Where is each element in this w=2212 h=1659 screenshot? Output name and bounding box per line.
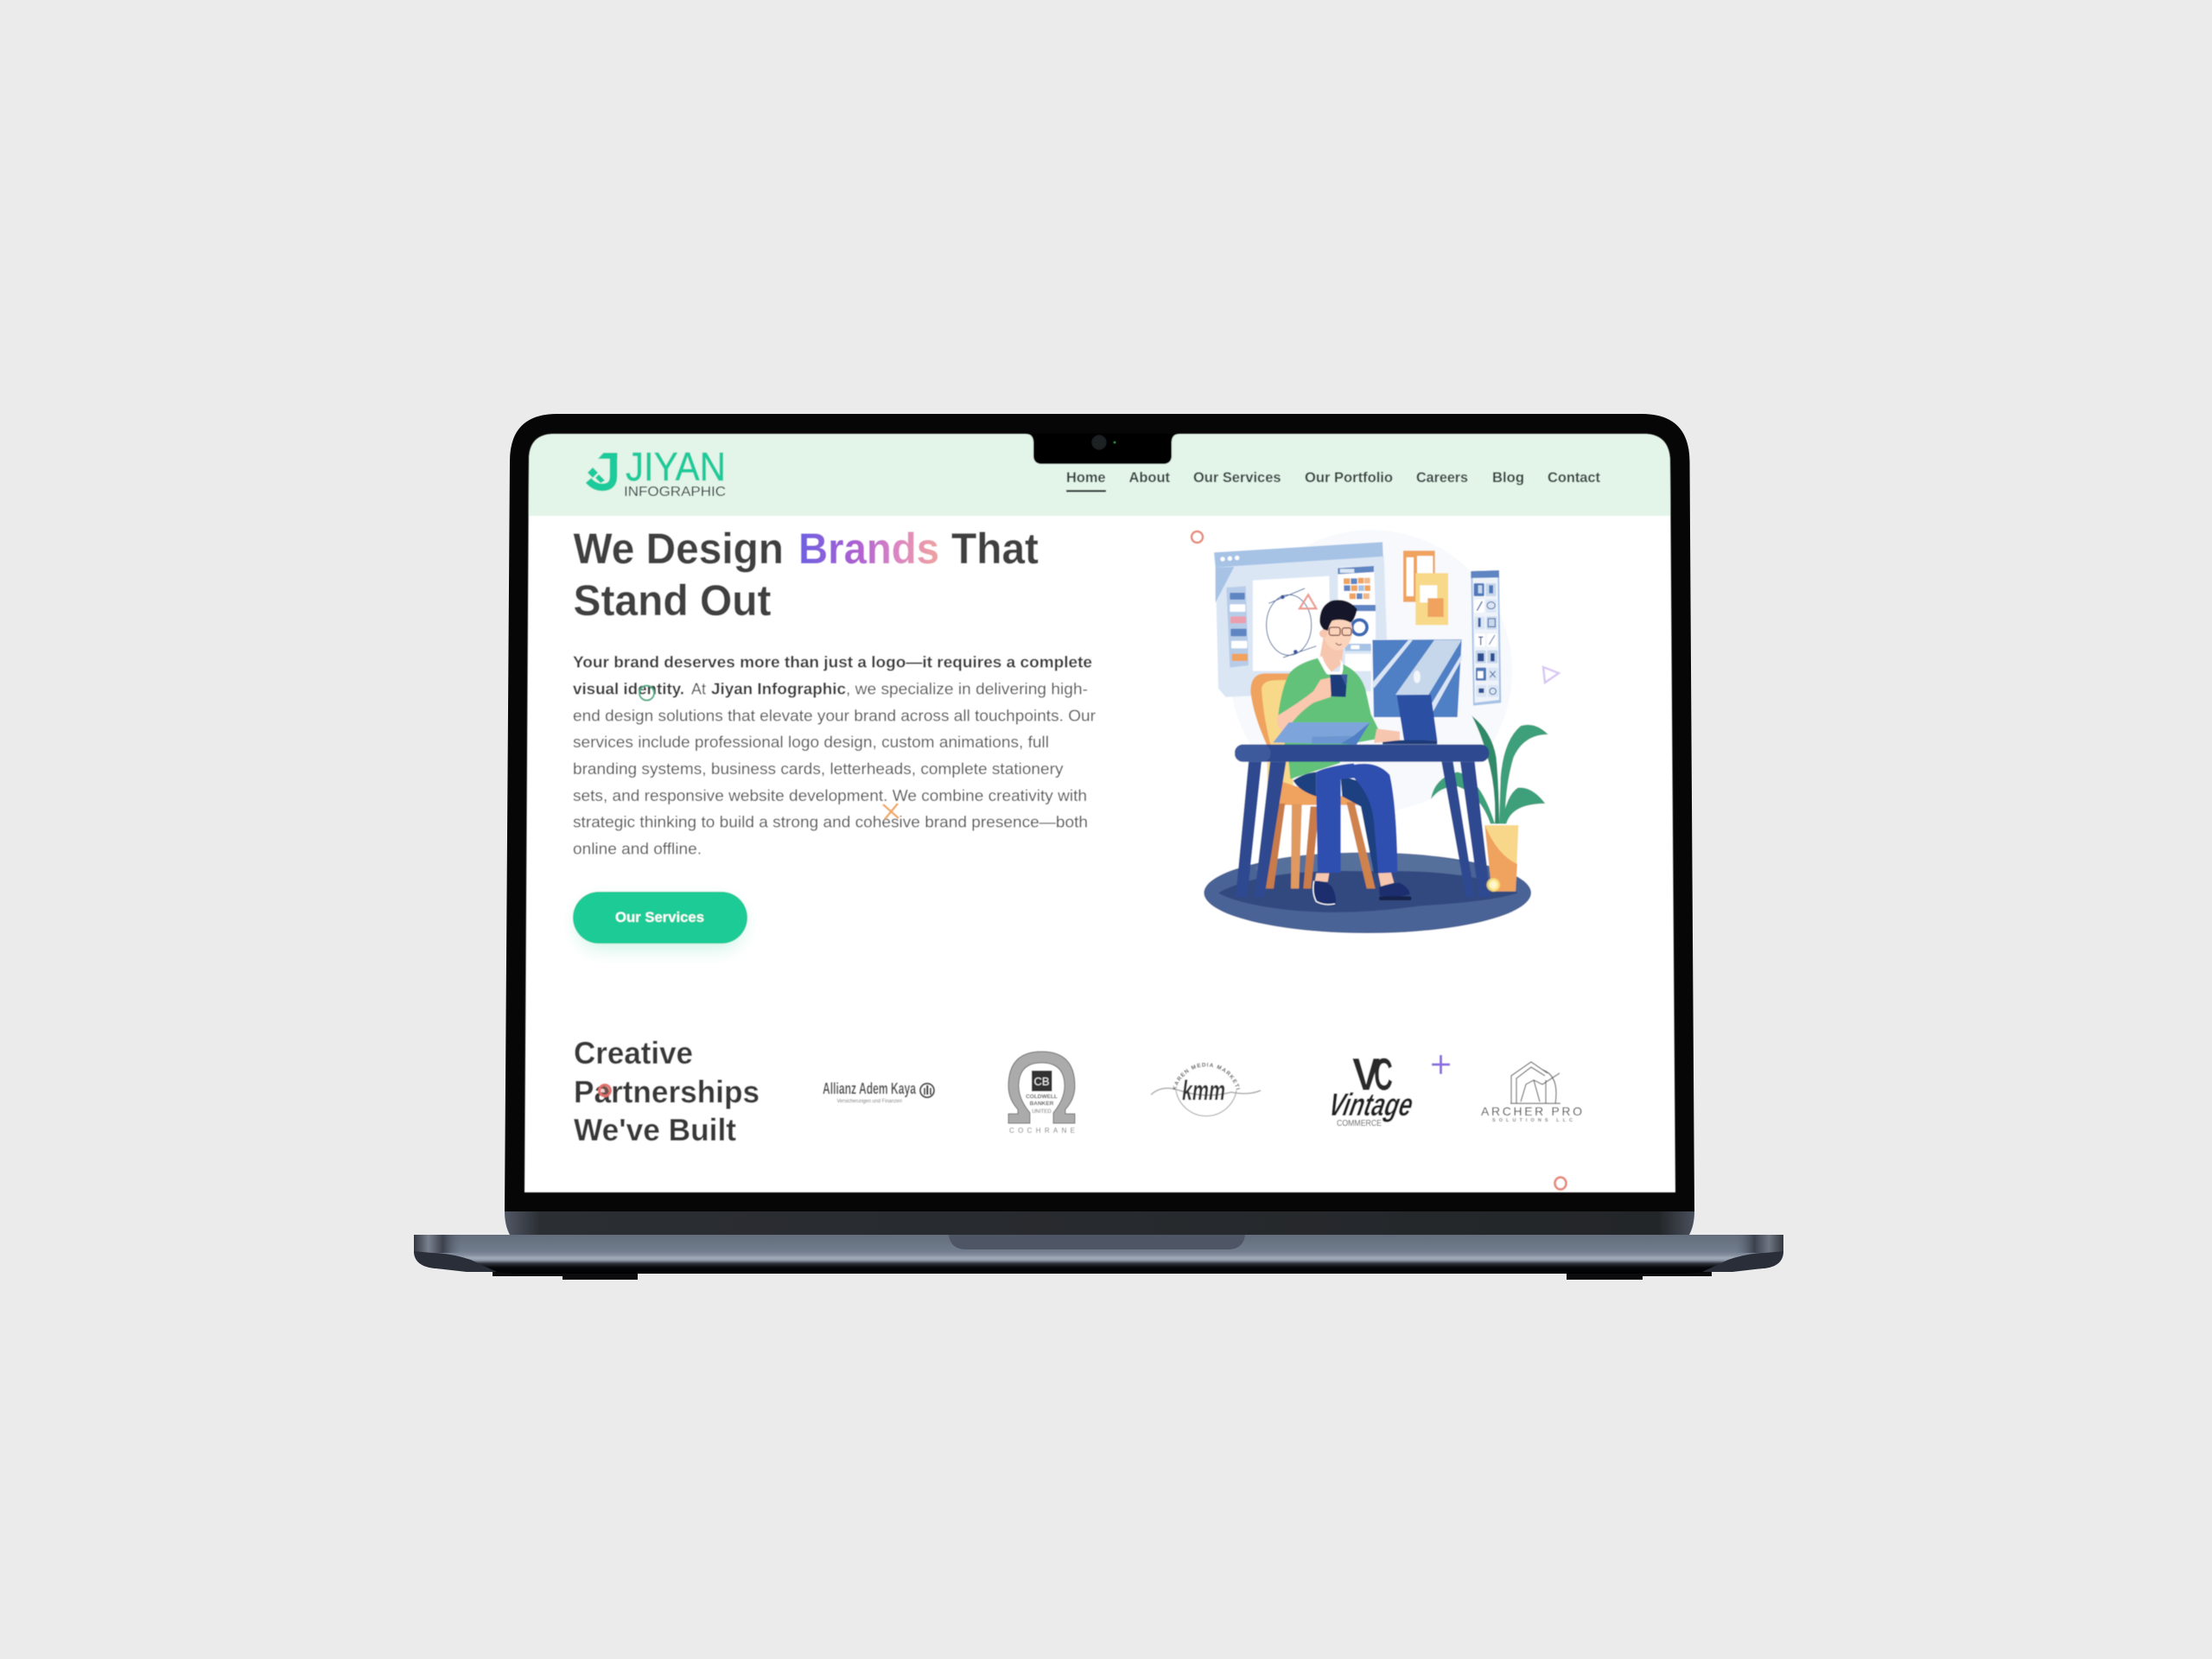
hand on laptop	[1374, 728, 1400, 743]
orange and yellow cards	[1403, 550, 1448, 625]
hero paragraph: At	[691, 679, 707, 698]
navigation: Home	[1066, 470, 1106, 486]
logo: Coldwell Banker Cochrane: BANKER	[1030, 1101, 1054, 1107]
rug	[1204, 853, 1531, 933]
laptop	[414, 414, 1783, 1280]
hero heading: That	[951, 524, 1039, 573]
hero paragraph: visual identity.	[573, 679, 684, 698]
partnerships heading	[574, 1035, 760, 1147]
plant	[1431, 715, 1548, 823]
head	[1324, 611, 1352, 651]
glasses	[1329, 627, 1340, 635]
decorative orange cross	[883, 804, 899, 819]
screen background	[524, 434, 1675, 1192]
logo: VC Vintage Commerce	[1325, 1049, 1416, 1128]
logo: Coldwell Banker Cochrane: CB	[1033, 1075, 1050, 1088]
hero illustration	[1204, 530, 1548, 933]
decorative ring top	[1192, 531, 1203, 543]
glow spark	[1486, 878, 1500, 892]
backdrop circle	[1230, 530, 1512, 812]
hero paragraph	[573, 653, 1096, 857]
logo: Coldwell Banker Cochrane: COCHRANE	[1009, 1127, 1075, 1135]
logo: kmm	[1150, 1062, 1262, 1117]
hero paragraph: end design solutions that elevate your brand across all touchpoints. Our	[573, 707, 1096, 724]
logo: Coldwell Banker Cochrane: COLDWELL	[1026, 1094, 1058, 1100]
mug	[1330, 675, 1347, 697]
logo icon	[588, 453, 617, 487]
logo: Archer Pro Solutions: SOLUTIONS LLC	[1492, 1118, 1573, 1123]
hero paragraph: branding systems, business cards, letterheads, complete stationery	[573, 760, 1064, 778]
forearm	[1277, 677, 1333, 733]
decorative green ring	[639, 686, 654, 700]
shoes	[1313, 880, 1411, 906]
hero paragraph: online and offline.	[573, 840, 702, 857]
hero heading: Stand Out	[574, 576, 772, 625]
notch	[1025, 434, 1180, 464]
hero paragraph: Jiyan Infographic	[711, 679, 846, 698]
hero paragraph: services include professional logo design, custom animations, full	[573, 733, 1049, 751]
ankles	[1315, 874, 1329, 882]
shirt	[1278, 658, 1378, 779]
hero heading: Brands	[798, 524, 939, 573]
laptop base	[414, 1235, 1783, 1280]
logo subtitle: INFOGRAPHIC	[624, 485, 726, 499]
monitor back	[1372, 639, 1462, 717]
chair	[1250, 673, 1376, 888]
laptop bezel	[505, 414, 1694, 1211]
laptop hinge	[505, 1211, 1694, 1235]
hair	[1319, 600, 1357, 631]
smile	[1336, 643, 1342, 645]
left toolbar	[1226, 586, 1249, 668]
logo: Coldwell Banker Cochrane	[1008, 1052, 1075, 1135]
navigation: Our Services	[1193, 470, 1281, 486]
button: Our Services: Our Services	[615, 910, 704, 925]
designer figure	[1277, 600, 1411, 906]
navigation	[1066, 470, 1600, 493]
decorative ring bottom	[1555, 1177, 1566, 1189]
logo: kmm: kmm	[1182, 1075, 1225, 1106]
hero paragraph: strategic thinking to build a strong and cohesive brand presence—both	[573, 812, 1088, 831]
laptop on desk	[1382, 695, 1437, 744]
tool palette	[1471, 570, 1501, 706]
decorative red ring	[600, 1085, 610, 1096]
logo: VC Vintage Commerce: C	[1374, 1049, 1393, 1101]
neck	[1319, 637, 1344, 672]
logo: VC Vintage Commerce: COMMERCE	[1337, 1119, 1382, 1128]
hero heading	[574, 524, 1039, 625]
logo: Allianz Adem Kaya: Versicherungen und Finanzen	[836, 1098, 902, 1104]
camera	[1092, 435, 1106, 449]
navigation: Blog	[1492, 470, 1524, 486]
logo: Archer Pro Solutions: ARCHER PRO	[1481, 1104, 1582, 1118]
button: Our Services	[573, 892, 747, 949]
plant pot	[1484, 825, 1518, 892]
logo: VC Vintage Commerce: Vintage	[1325, 1086, 1416, 1122]
navigation: Contact	[1548, 470, 1600, 486]
hero paragraph: Your brand deserves more than just a logo—it requires a complete	[573, 653, 1092, 671]
upper body	[1277, 600, 1400, 779]
drawing tablet	[1273, 722, 1370, 745]
logo: Allianz Adem Kaya	[823, 1080, 934, 1104]
partnerships heading: Partnerships	[574, 1074, 760, 1109]
navigation: About	[1128, 470, 1170, 486]
trousers	[1294, 763, 1397, 874]
decorative plus	[1432, 1055, 1450, 1074]
partnerships heading: Creative	[574, 1035, 693, 1071]
desk	[1235, 745, 1491, 897]
logo: VC Vintage Commerce: V	[1352, 1049, 1380, 1101]
palette panel	[1338, 566, 1376, 605]
logo wordmark: JIYAN	[626, 444, 726, 489]
hero heading: We Design	[574, 524, 784, 573]
decorative triangle	[1543, 667, 1559, 683]
design window	[1214, 542, 1387, 697]
logo: Allianz Adem Kaya: Allianz Adem Kaya	[823, 1080, 917, 1097]
hero paragraph: , we specialize in delivering high-	[846, 679, 1088, 698]
hero paragraph: sets, and responsive website development. We combine creativity with	[573, 786, 1087, 804]
screen	[524, 433, 1676, 1193]
collar	[1319, 656, 1343, 675]
navigation: Our Portfolio	[1305, 470, 1393, 486]
logo: Jiyan Infographic	[588, 444, 726, 499]
logo: Archer Pro Solutions	[1481, 1062, 1582, 1123]
header bar	[529, 434, 1671, 516]
logo: Coldwell Banker Cochrane: UNITED	[1032, 1109, 1052, 1115]
partnerships heading: We've Built	[574, 1112, 736, 1147]
logo: kmm: KAREN MEDIA MARKETING	[1172, 1062, 1241, 1090]
navigation: Careers	[1416, 470, 1468, 486]
